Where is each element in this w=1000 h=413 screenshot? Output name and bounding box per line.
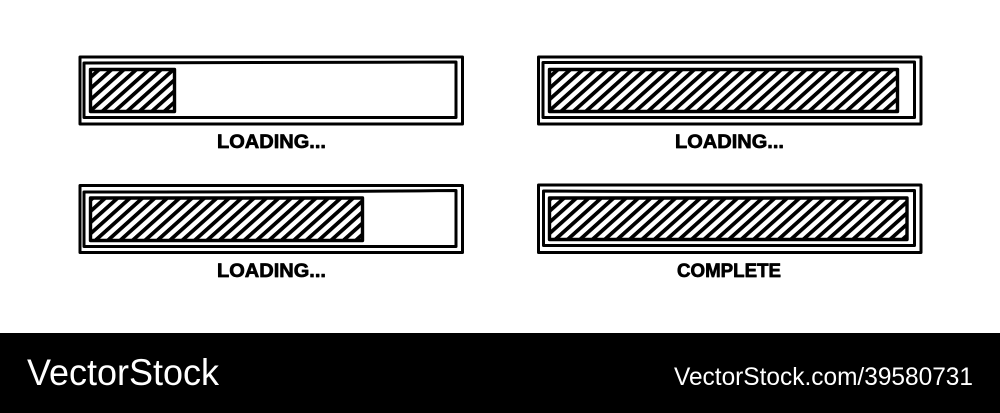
inner frame xyxy=(543,62,914,118)
inner frame xyxy=(544,190,914,246)
progress bar: medium, bottom left xyxy=(80,186,462,252)
label: loading top left: LOADING... xyxy=(217,132,326,153)
progress bar: nearly full, top right xyxy=(538,57,921,124)
watermark footer xyxy=(0,333,1000,413)
outer frame xyxy=(538,185,921,252)
hatched fill xyxy=(90,70,174,112)
progress bar: low, top left xyxy=(80,57,462,124)
outer frame xyxy=(538,57,921,124)
label: loading top right: LOADING... xyxy=(675,132,784,153)
hatched fill xyxy=(550,70,898,112)
hatched fill xyxy=(90,198,362,240)
inner frame xyxy=(84,190,456,246)
hatched fill xyxy=(550,198,907,240)
inner frame xyxy=(84,62,456,118)
label: complete: COMPLETE xyxy=(677,261,781,282)
image reference: VectorStock.com/39580731 xyxy=(674,363,973,391)
outer frame xyxy=(80,57,462,124)
label: loading bottom left: LOADING... xyxy=(217,261,326,282)
outer frame xyxy=(80,186,462,252)
brand name: VectorStock xyxy=(27,352,219,393)
progress bar: complete, bottom right xyxy=(538,185,921,252)
